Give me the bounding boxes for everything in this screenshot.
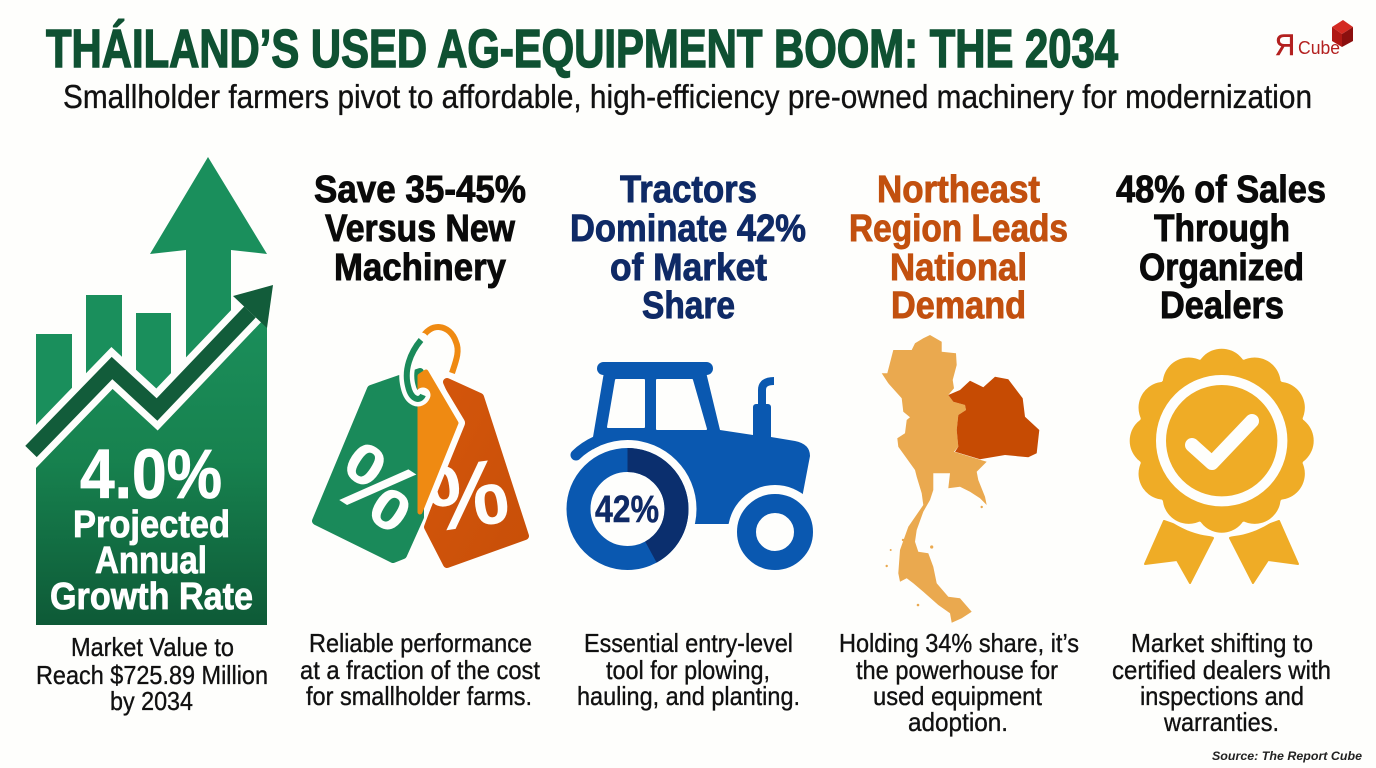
stat: 4.0%: 4.0% [80, 435, 222, 513]
label: projected annual growth rate: Growth Rate [50, 576, 253, 618]
heading: northeast [849, 169, 1068, 327]
heading: tractors 42% [570, 169, 806, 327]
label: projected annual growth rate: Annual [95, 540, 207, 582]
panel: growth rate [0, 157, 273, 716]
text: tractors description: tool for plowing, [606, 655, 770, 685]
text: market value: Market Value to [71, 632, 234, 662]
icon: tractor [558, 362, 822, 579]
icon: price tags: % [315, 423, 440, 553]
label: projected annual growth rate [50, 504, 253, 618]
heading: 48% of sales: Through [1154, 208, 1290, 250]
icon: growth arrow and bars [0, 157, 273, 625]
heading: save 35-45%: Save 35-45% [314, 169, 526, 211]
text: savings description: Reliable performance [309, 628, 532, 658]
heading: 48% of sales: 48% of Sales [1116, 169, 1326, 211]
label: projected annual growth rate: Projected [73, 504, 230, 546]
text: savings description: at a fraction of the cost [300, 655, 541, 685]
text: savings description [300, 628, 541, 711]
text: tractors description [577, 628, 800, 711]
panel: northeast region [839, 169, 1079, 737]
logo: RCube: Я [1275, 29, 1295, 62]
text: tractors description: hauling, and planting. [577, 681, 800, 711]
heading: northeast: Region Leads [849, 208, 1068, 250]
text: dealers description: certified dealers with [1112, 655, 1331, 685]
text: market value [36, 632, 268, 716]
text: northeast description: Holding 34% share, it’s [839, 628, 1079, 658]
heading: save 35-45%: Machinery [334, 247, 506, 289]
heading: 48% of sales [1116, 169, 1326, 327]
logo: RCube: Cube [1298, 38, 1340, 58]
panel: organized dealers [1112, 169, 1331, 737]
heading: tractors 42%: Tractors [620, 169, 757, 211]
icon: certified badge [1129, 348, 1314, 583]
text: dealers description: inspections and [1140, 681, 1304, 711]
heading: save 35-45% [314, 169, 526, 289]
text: market value: Reach $725.89 Million [36, 660, 268, 690]
icon: thailand map [882, 335, 1039, 623]
icon: price tags: % [420, 440, 515, 552]
heading: tractors 42%: of Market [610, 247, 767, 289]
icon: tractor: 42% [595, 489, 659, 531]
text: northeast description: adoption. [908, 707, 1008, 737]
heading: northeast: Demand [891, 285, 1026, 327]
logo: RCube [1275, 20, 1353, 62]
text: tractors description: Essential entry-level [584, 628, 793, 658]
heading: 48% of sales: Organized [1139, 247, 1304, 289]
text: northeast description: used equipment [873, 681, 1043, 711]
text: northeast description [839, 628, 1079, 737]
heading: 48% of sales: Dealers [1160, 285, 1284, 327]
panel: savings [300, 169, 541, 711]
text: market value: by 2034 [110, 686, 193, 716]
icon: price tags [311, 327, 525, 564]
panel: tractors [558, 169, 822, 711]
source note: Source: The Report Cube [1212, 749, 1362, 763]
text: dealers description: warranties. [1163, 707, 1279, 737]
heading: northeast: Northeast [877, 169, 1040, 211]
heading: northeast: National [890, 247, 1027, 289]
heading: tractors 42%: Share [642, 285, 735, 327]
text: dealers description [1112, 628, 1331, 737]
heading: tractors 42%: Dominate 42% [570, 208, 806, 250]
text: savings description: for smallholder farms. [306, 681, 532, 711]
text: dealers description: Market shifting to [1131, 628, 1313, 658]
heading: save 35-45%: Versus New [325, 208, 515, 250]
text: northeast description: the powerhouse for [856, 655, 1058, 685]
